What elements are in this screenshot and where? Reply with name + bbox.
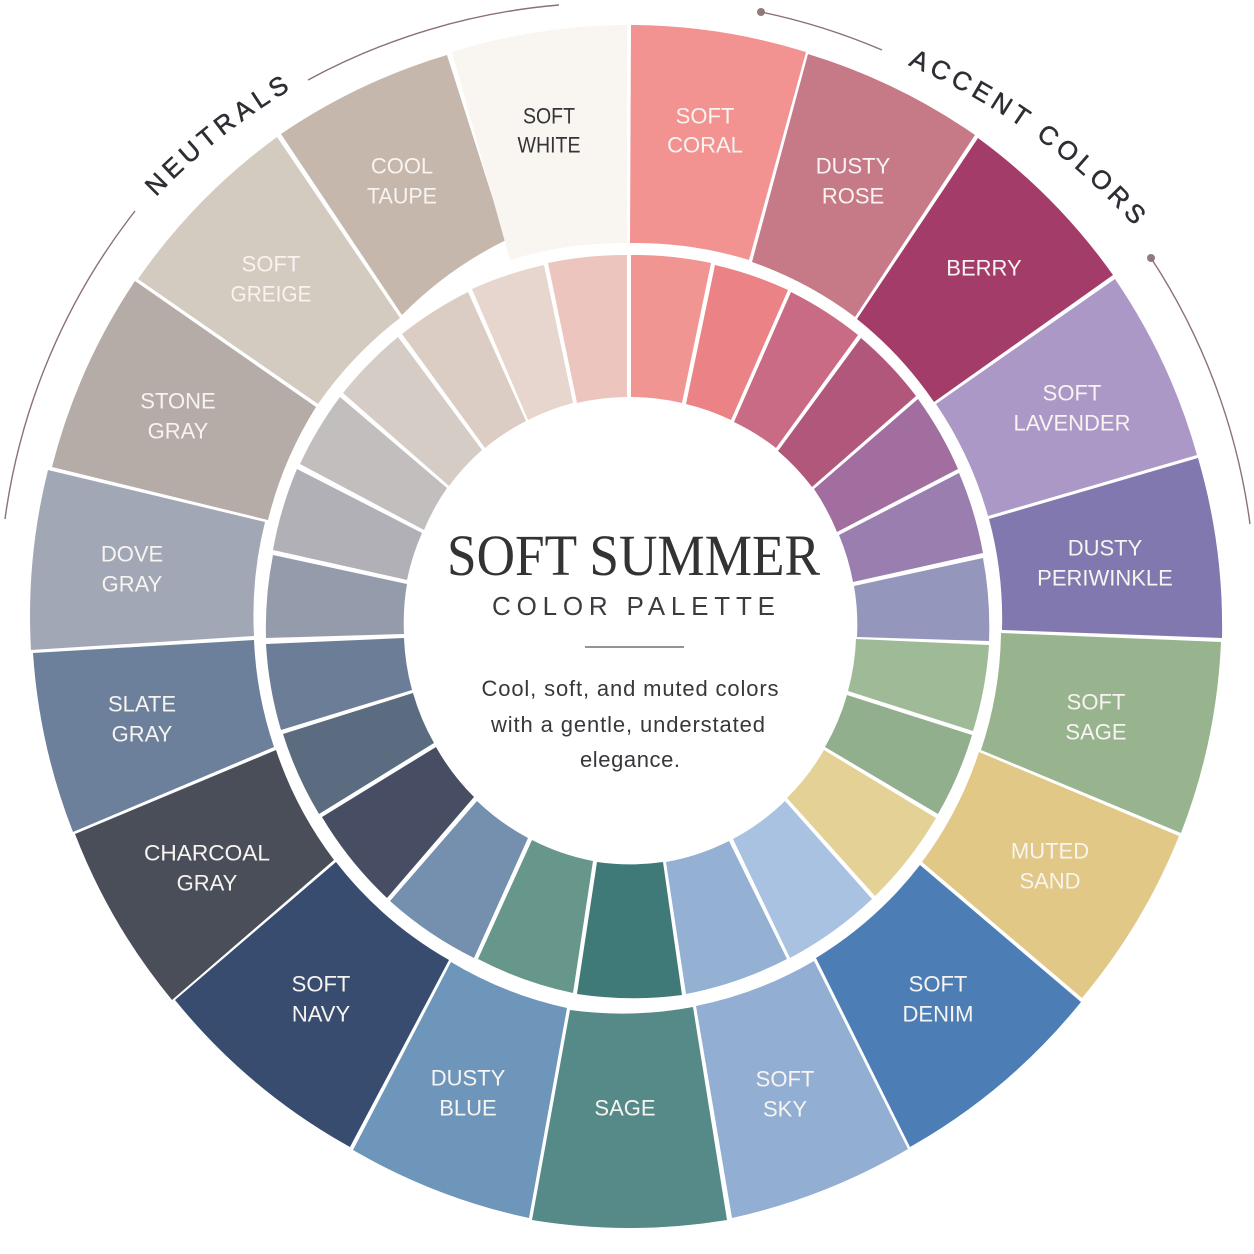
segment: soft white: WHITE — [518, 132, 580, 158]
segment: dusty rose: ROSE — [822, 184, 884, 208]
center title block — [447, 523, 820, 772]
segment: stone gray: STONE — [140, 388, 216, 414]
segment: muted sand: SAND — [1019, 868, 1081, 894]
segment: soft sage — [981, 633, 1221, 833]
segment: dusty rose — [752, 54, 975, 317]
segment: charcoal gray: CHARCOAL — [144, 840, 270, 866]
segment: soft greige: SOFT — [242, 252, 300, 276]
segment: soft coral: CORAL — [667, 132, 743, 158]
description text: Cool, soft, and muted colors — [482, 676, 778, 701]
description text: elegance. — [580, 747, 680, 772]
accent colors group label with arc: ACCENT COLORS — [908, 51, 1145, 224]
segment: soft denim: SOFT — [909, 972, 967, 996]
segment: dusty blue: BLUE — [439, 1096, 497, 1120]
segment: soft coral — [630, 25, 806, 260]
description text — [482, 676, 778, 772]
description text: with a gentle, understated — [490, 712, 765, 737]
segment: dusty blue: DUSTY — [431, 1066, 506, 1090]
segment: soft navy: NAVY — [292, 1002, 350, 1026]
segment: soft sky: SKY — [763, 1096, 807, 1122]
segment: dove gray: GRAY — [102, 572, 163, 596]
segment: dove gray: DOVE — [101, 542, 163, 566]
segment: soft lavender: LAVENDER — [1014, 410, 1130, 436]
segment: berry — [857, 138, 1113, 402]
segment: dusty blue — [353, 962, 567, 1218]
segment: cool taupe — [281, 55, 506, 315]
neutrals group label with arc: NEUTRALS — [144, 76, 288, 196]
segment: slate gray: GRAY — [112, 722, 173, 746]
segment: slate gray: SLATE — [108, 692, 176, 716]
inner ring of color swatches — [266, 255, 989, 998]
title: SOFT SUMMER — [447, 523, 820, 588]
segment: sage — [532, 1007, 727, 1228]
segment: soft greige: GREIGE — [230, 282, 312, 306]
segment: stone gray: GRAY — [148, 418, 209, 444]
segment: cool taupe: TAUPE — [367, 184, 437, 208]
segment: muted sand: MUTED — [1011, 838, 1089, 864]
segment: muted sand — [922, 752, 1179, 998]
segment: soft sage: SAGE — [1065, 720, 1127, 744]
segment: dusty rose: DUSTY — [816, 154, 891, 178]
segment: soft denim — [816, 865, 1081, 1147]
segment: soft navy — [175, 862, 449, 1147]
neutrals group label with arc — [4, 4, 559, 520]
subtitle: COLOR PALETTE — [492, 591, 775, 621]
segment: stone gray — [52, 281, 316, 520]
segment: soft greige — [138, 137, 400, 404]
segment: charcoal gray: GRAY — [177, 870, 238, 896]
segment: sage: SAGE — [594, 1096, 656, 1120]
segment: soft navy: SOFT — [292, 972, 350, 996]
segment: soft coral: SOFT — [676, 104, 734, 128]
segment: dusty periwinkle — [989, 458, 1222, 638]
segment: soft sky: SOFT — [756, 1066, 814, 1092]
accent colors group label with arc — [757, 8, 1251, 524]
segment: soft denim: DENIM — [903, 1002, 973, 1026]
segment: soft lavender: SOFT — [1043, 380, 1101, 406]
segment: soft white — [452, 25, 627, 260]
segment: cool taupe: COOL — [371, 154, 433, 178]
segment: soft sage: SOFT — [1067, 690, 1125, 714]
segment: dove gray — [30, 470, 265, 650]
segment: dusty periwinkle: PERIWINKLE — [1037, 566, 1173, 590]
segment: soft sky — [696, 961, 908, 1218]
segment: soft lavender — [936, 279, 1197, 516]
segment: slate gray — [33, 640, 274, 832]
segment: soft white: SOFT — [523, 104, 575, 128]
segment: charcoal gray — [75, 750, 334, 1000]
segment: berry: BERRY — [946, 256, 1022, 280]
segment: dusty periwinkle: DUSTY — [1068, 536, 1143, 560]
